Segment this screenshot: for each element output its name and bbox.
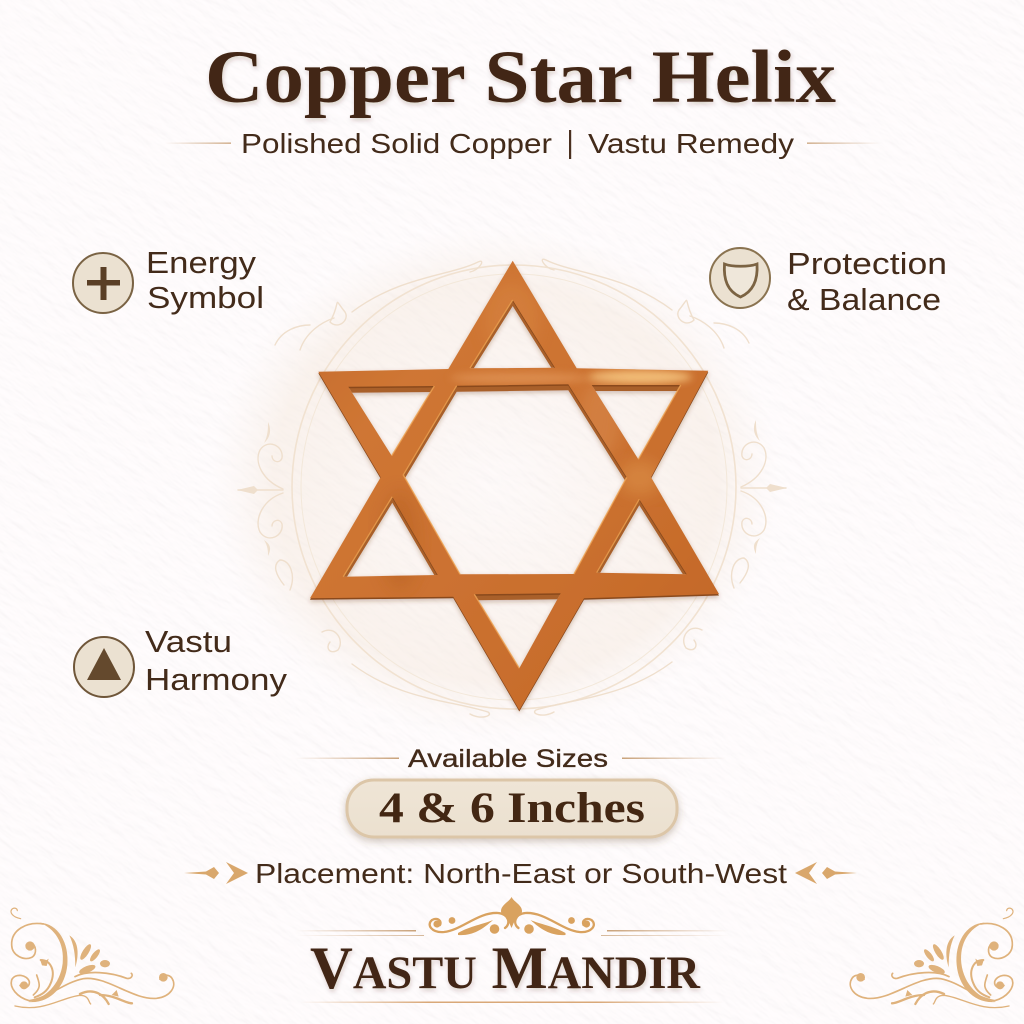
icon: triangle badge: [74, 637, 134, 697]
faint mandala background with glow: [210, 227, 787, 737]
hole edge glints: [343, 300, 681, 668]
footer ornament: [430, 897, 594, 935]
subtitle with rules: Polished Solid Copper: [241, 128, 552, 159]
subtitle with rules: Vastu Remedy: [588, 128, 794, 159]
feature: energy symbol: Energy: [146, 245, 257, 280]
feature: vastu harmony: Vastu: [145, 624, 232, 659]
title: Copper Star Helix: [205, 36, 837, 119]
feature: protection and balance: & Balance: [787, 282, 941, 317]
subtitle with rules: [165, 128, 881, 159]
icon: left ornament: [184, 862, 248, 884]
icon: shield badge: [710, 248, 770, 308]
footer rules: [296, 930, 729, 1003]
copper star: [310, 261, 719, 716]
icon: plus badge: [73, 253, 133, 313]
size pill: 4 & 6 Inches: [379, 785, 645, 832]
feature: vastu harmony: [74, 624, 288, 697]
corner flourish: right: [850, 908, 1013, 1008]
feature: energy symbol: Symbol: [147, 280, 264, 315]
corner flourish: left: [11, 908, 174, 1008]
feature: protection and balance: [710, 246, 947, 317]
star highlights: [380, 282, 692, 590]
size pill: [347, 780, 677, 837]
placement line: Placement: North-East or South-West: [255, 858, 787, 889]
brand wordmark: VASTU MANDIR: [310, 935, 701, 1001]
icon: right ornament: [795, 862, 857, 884]
feature: vastu harmony: Harmony: [145, 662, 288, 697]
feature: protection and balance: Protection: [787, 246, 947, 281]
placement line: [184, 858, 857, 889]
feature: energy symbol: [73, 245, 264, 315]
available sizes heading: Available Sizes: [408, 745, 608, 773]
